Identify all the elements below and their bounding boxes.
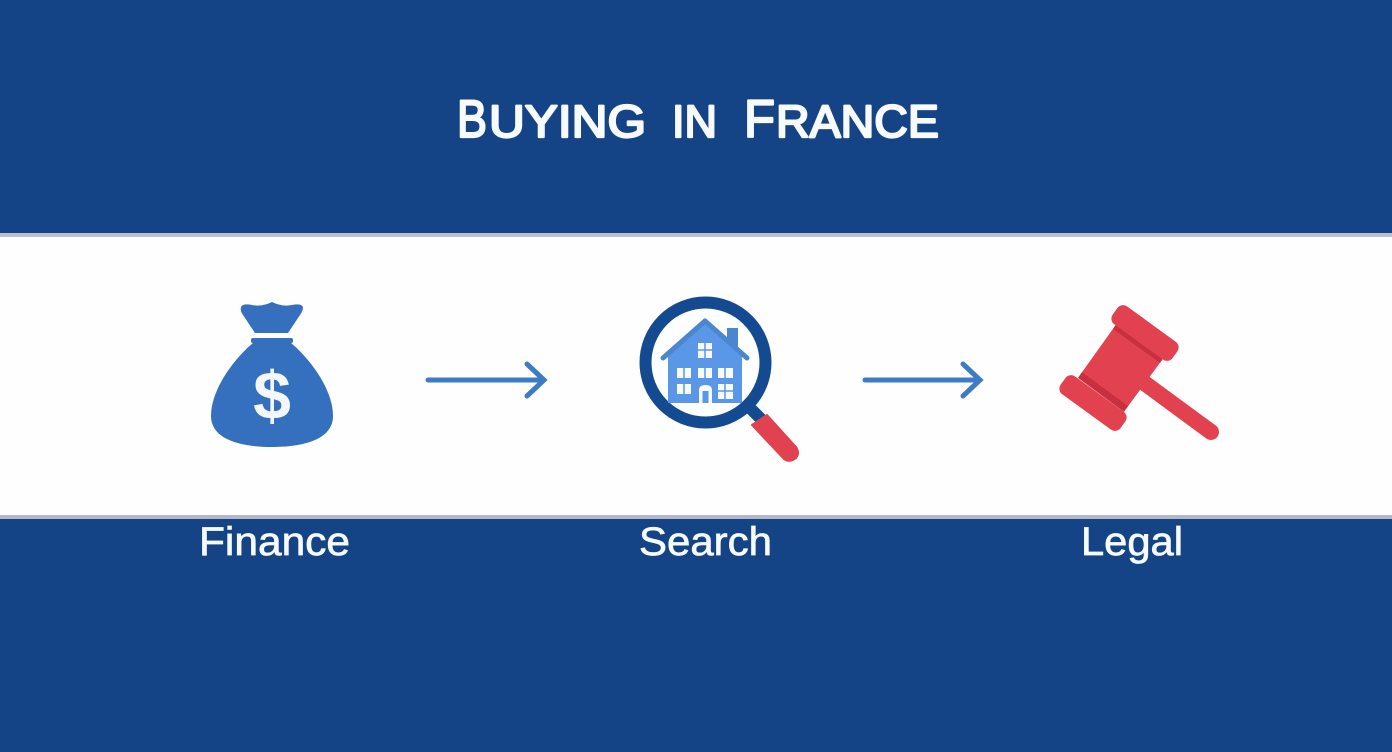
icon: money bag: $ xyxy=(253,358,291,434)
icon: house xyxy=(663,321,747,403)
icon: magnifier with house xyxy=(646,302,798,461)
white band xyxy=(0,233,1392,519)
arrow: search to legal xyxy=(865,364,980,396)
icon: money bag xyxy=(211,302,333,447)
title: B xyxy=(457,90,487,149)
title: RANCE xyxy=(776,96,939,147)
title xyxy=(457,90,939,149)
title: UYING xyxy=(489,96,646,147)
title: F xyxy=(744,90,775,149)
title: IN xyxy=(672,96,717,147)
icon: gavel xyxy=(1057,302,1211,434)
label: legal: Legal xyxy=(1081,520,1183,564)
label: finance: Finance xyxy=(199,520,350,564)
label: search: Search xyxy=(639,520,772,564)
arrow: finance to search xyxy=(428,364,544,396)
